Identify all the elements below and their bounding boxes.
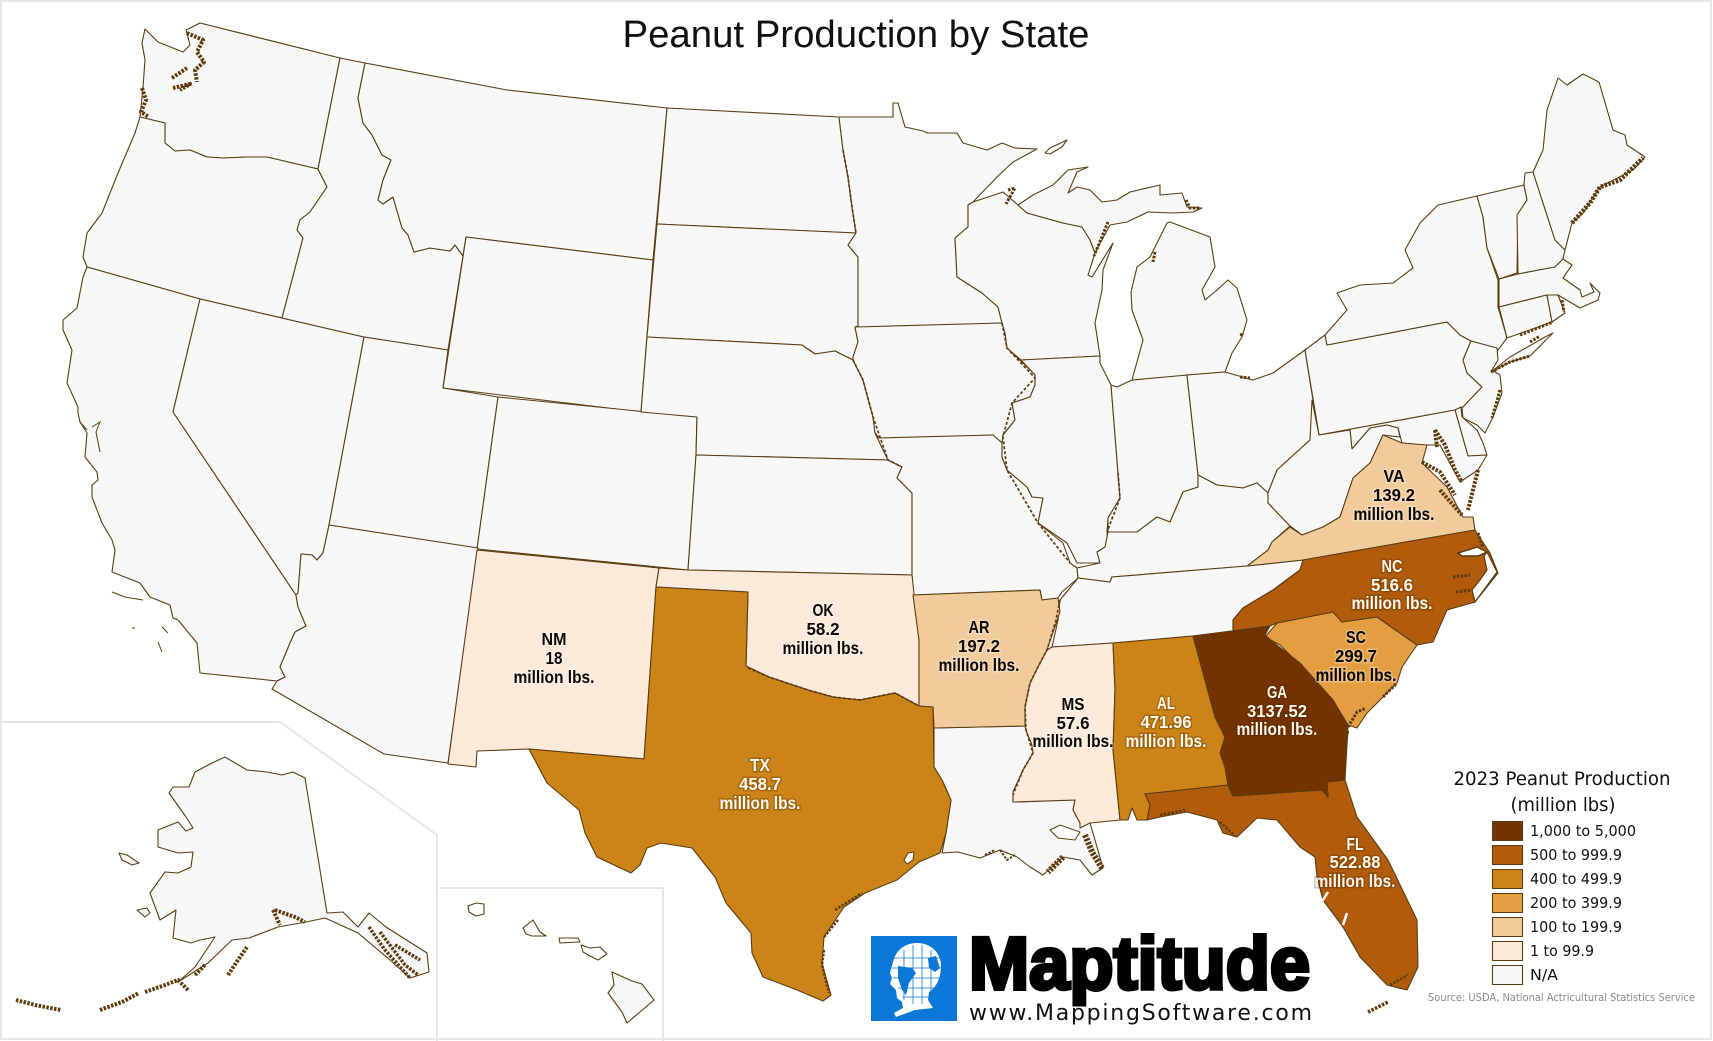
state: Georgia xyxy=(1193,626,1348,797)
logo: Maptitude xyxy=(871,922,1312,1026)
state: Montana xyxy=(358,63,667,260)
coast: Aleutians and Kodiak xyxy=(16,910,305,1010)
coast: Chesapeake Bay xyxy=(1422,430,1478,515)
state: Oklahoma xyxy=(656,568,919,706)
state: Mississippi xyxy=(1013,643,1120,828)
label: Georgia: GA xyxy=(1267,682,1287,702)
state: South Dakota xyxy=(647,224,858,360)
state: Florida xyxy=(1145,780,1418,990)
legend item: 500 to 999.9 xyxy=(1492,846,1622,864)
coast: western Louisiana lakes xyxy=(985,850,1015,860)
legend item: 1 to 99.9: 1 to 99.9 xyxy=(1530,942,1594,960)
label: South Carolina: SC xyxy=(1346,627,1366,647)
coast: Maine xyxy=(1572,158,1643,223)
label: New Mexico: million lbs. xyxy=(514,667,594,687)
legend item: 1,000 to 5,000 xyxy=(1492,822,1636,840)
label: Arkansas: AR xyxy=(968,617,990,637)
label: Florida: 522.88 xyxy=(1330,852,1381,872)
sound: Pamlico and Albemarle xyxy=(1472,552,1497,602)
state: Arizona xyxy=(272,525,478,763)
state: Iowa xyxy=(853,323,1035,443)
label: North Carolina: NC xyxy=(1382,556,1403,576)
state: Nebraska xyxy=(641,337,888,460)
bay: Galveston xyxy=(904,852,914,864)
island: Big Island xyxy=(608,972,654,1023)
state: Texas xyxy=(529,587,951,1001)
legend item: 100 to 199.9 xyxy=(1492,918,1622,936)
logo wordmark: Maptitude xyxy=(969,922,1310,1005)
state: Arkansas xyxy=(913,590,1060,728)
coast: Great Lakes xyxy=(1006,188,1250,378)
label: Virginia: VA xyxy=(1384,466,1405,486)
label: New Mexico: NM xyxy=(542,629,566,649)
legend item: 400 to 499.9 xyxy=(1492,870,1622,888)
island: Molokai xyxy=(559,938,580,943)
label: Mississippi: 57.6 xyxy=(1056,713,1090,733)
state: Kansas xyxy=(688,455,912,575)
state: Connecticut xyxy=(1499,295,1552,338)
icon: globe head xyxy=(871,936,957,1021)
state: North Dakota xyxy=(657,108,856,233)
state: Kentucky xyxy=(1077,475,1290,582)
state: Idaho xyxy=(282,58,463,350)
label: New Mexico: 18 xyxy=(546,648,563,668)
legend item: 100 to 199.9: 100 to 199.9 xyxy=(1530,918,1622,936)
coast: Southeast panhandle xyxy=(369,927,420,978)
legend xyxy=(1454,768,1670,984)
state: Alabama xyxy=(1113,636,1228,820)
label: North Carolina xyxy=(1352,556,1432,613)
label: North Carolina: million lbs. xyxy=(1352,593,1432,613)
label: Mississippi xyxy=(1032,694,1114,751)
state: North Carolina xyxy=(1233,530,1498,645)
legend item: N/A: N/A xyxy=(1530,966,1559,984)
label: Arkansas xyxy=(938,617,1020,675)
coast: Florida panhandle and keys xyxy=(1160,810,1408,985)
legend item: 1,000 to 5,000: 1,000 to 5,000 xyxy=(1530,822,1636,840)
label: Virginia xyxy=(1354,466,1434,524)
coast: Texas bays xyxy=(822,893,862,993)
inset map: Hawaii xyxy=(468,903,654,1023)
label: Mississippi: MS xyxy=(1062,694,1084,714)
label: Florida: million lbs. xyxy=(1314,871,1396,891)
label: Texas xyxy=(720,755,800,813)
state: Utah xyxy=(329,337,498,549)
coast: Puget Sound xyxy=(141,33,204,117)
label: Oklahoma: OK xyxy=(812,600,834,620)
label: Alabama: 471.96 xyxy=(1140,712,1192,732)
label: South Carolina xyxy=(1316,627,1396,685)
state: Colorado xyxy=(477,397,697,570)
label: South Carolina: million lbs. xyxy=(1316,665,1396,685)
title: Peanut Production by State xyxy=(622,14,1090,56)
coast: Georgia and Carolina xyxy=(1345,684,1396,745)
legend item: 1 to 99.9 xyxy=(1492,942,1594,960)
label: Oklahoma xyxy=(782,600,864,658)
state: New York xyxy=(1325,196,1507,350)
state: Illinois xyxy=(1002,356,1120,563)
legend item: 200 to 399.9: 200 to 399.9 xyxy=(1530,894,1622,912)
inset frame: Hawaii xyxy=(439,888,663,1041)
label: North Carolina: 516.6 xyxy=(1371,575,1413,595)
state: Vermont xyxy=(1477,185,1527,279)
state: Wisconsin xyxy=(955,192,1113,360)
state: Indiana xyxy=(1108,375,1198,532)
state: New Hampshire xyxy=(1517,172,1565,274)
state: Michigan lower peninsula xyxy=(1131,222,1247,380)
state: Wyoming xyxy=(443,237,653,412)
island: Maui xyxy=(581,945,607,960)
lake: Pontchartrain xyxy=(1050,825,1080,840)
source note: Source: USDA, National Actricultural Statistics Service xyxy=(1428,992,1695,1004)
state: Nevada xyxy=(173,299,364,595)
inset map: Alaska xyxy=(16,757,429,1010)
state: Washington xyxy=(140,23,340,169)
label: Georgia xyxy=(1236,682,1318,739)
label: Texas: TX xyxy=(750,755,770,775)
label: Virginia: 139.2 xyxy=(1373,485,1415,505)
state: Louisiana xyxy=(934,726,1103,875)
state: Oregon xyxy=(83,117,327,318)
state: New Jersey xyxy=(1462,341,1502,433)
coast: North Carolina estuaries xyxy=(1453,533,1483,592)
coast: Louisiana delta xyxy=(1048,835,1102,872)
island: Kauai xyxy=(468,903,484,916)
legend item: 200 to 399.9 xyxy=(1492,894,1622,912)
label: Texas: million lbs. xyxy=(720,793,800,813)
state: Massachusetts xyxy=(1499,259,1600,308)
inset frame: Alaska xyxy=(0,722,437,1041)
state: South Carolina xyxy=(1265,612,1417,728)
label: Alabama: AL xyxy=(1157,693,1175,713)
label: Oklahoma: 58.2 xyxy=(806,619,840,639)
state: Tennessee xyxy=(1052,560,1303,647)
islands: St Lawrence and Nunivak xyxy=(119,853,139,865)
state: Michigan upper peninsula xyxy=(1018,167,1202,253)
island: Oahu xyxy=(523,920,546,936)
state value labels xyxy=(514,466,1434,891)
state: New Mexico xyxy=(448,550,659,767)
state: Alaska mainland xyxy=(150,757,429,982)
state: Rhode Island xyxy=(1547,295,1565,322)
label: South Carolina: 299.7 xyxy=(1335,646,1377,666)
state: Minnesota xyxy=(839,103,1037,327)
label: Georgia: million lbs. xyxy=(1236,719,1318,739)
state: Virginia xyxy=(1247,435,1475,566)
label: Texas: 458.7 xyxy=(739,774,781,794)
label: Florida xyxy=(1314,834,1396,891)
label: Arkansas: million lbs. xyxy=(938,655,1020,675)
state: West Virginia xyxy=(1268,400,1400,535)
label: Arkansas: 197.2 xyxy=(958,636,1000,656)
isle royale xyxy=(1045,140,1067,154)
state: California xyxy=(63,267,306,681)
legend item: 500 to 999.9: 500 to 999.9 xyxy=(1530,846,1622,864)
label: Virginia: million lbs. xyxy=(1354,504,1434,524)
coast: New England and Long Island xyxy=(1491,300,1564,418)
legend item: N/A xyxy=(1492,966,1559,984)
sound: Albemarle xyxy=(1458,547,1487,556)
label: Alabama: million lbs. xyxy=(1126,731,1206,751)
bay: Tampa xyxy=(1321,892,1347,925)
state: Ohio xyxy=(1187,350,1313,493)
coast: California islands xyxy=(80,422,168,652)
state: Missouri xyxy=(875,433,1078,600)
logo url: www.MappingSoftware.com xyxy=(969,1001,1312,1026)
label: New Mexico xyxy=(514,629,594,687)
legend title xyxy=(1454,768,1670,816)
label: Alabama xyxy=(1126,693,1206,751)
legend title: 2023 Peanut Production xyxy=(1454,768,1670,790)
label: Florida: FL xyxy=(1346,834,1364,854)
label: Mississippi: million lbs. xyxy=(1032,731,1114,751)
label: Georgia: 3137.52 xyxy=(1247,701,1307,721)
river border detail xyxy=(748,150,1120,795)
state: Maryland xyxy=(1319,410,1487,482)
state: Pennsylvania xyxy=(1305,322,1482,435)
label: Oklahoma: million lbs. xyxy=(782,638,864,658)
state: Delaware xyxy=(1455,407,1487,456)
state: Long Island xyxy=(1491,333,1553,372)
legend title: (million lbs) xyxy=(1510,794,1616,816)
state: Maine xyxy=(1533,74,1645,250)
legend item: 400 to 499.9: 400 to 499.9 xyxy=(1530,870,1622,888)
